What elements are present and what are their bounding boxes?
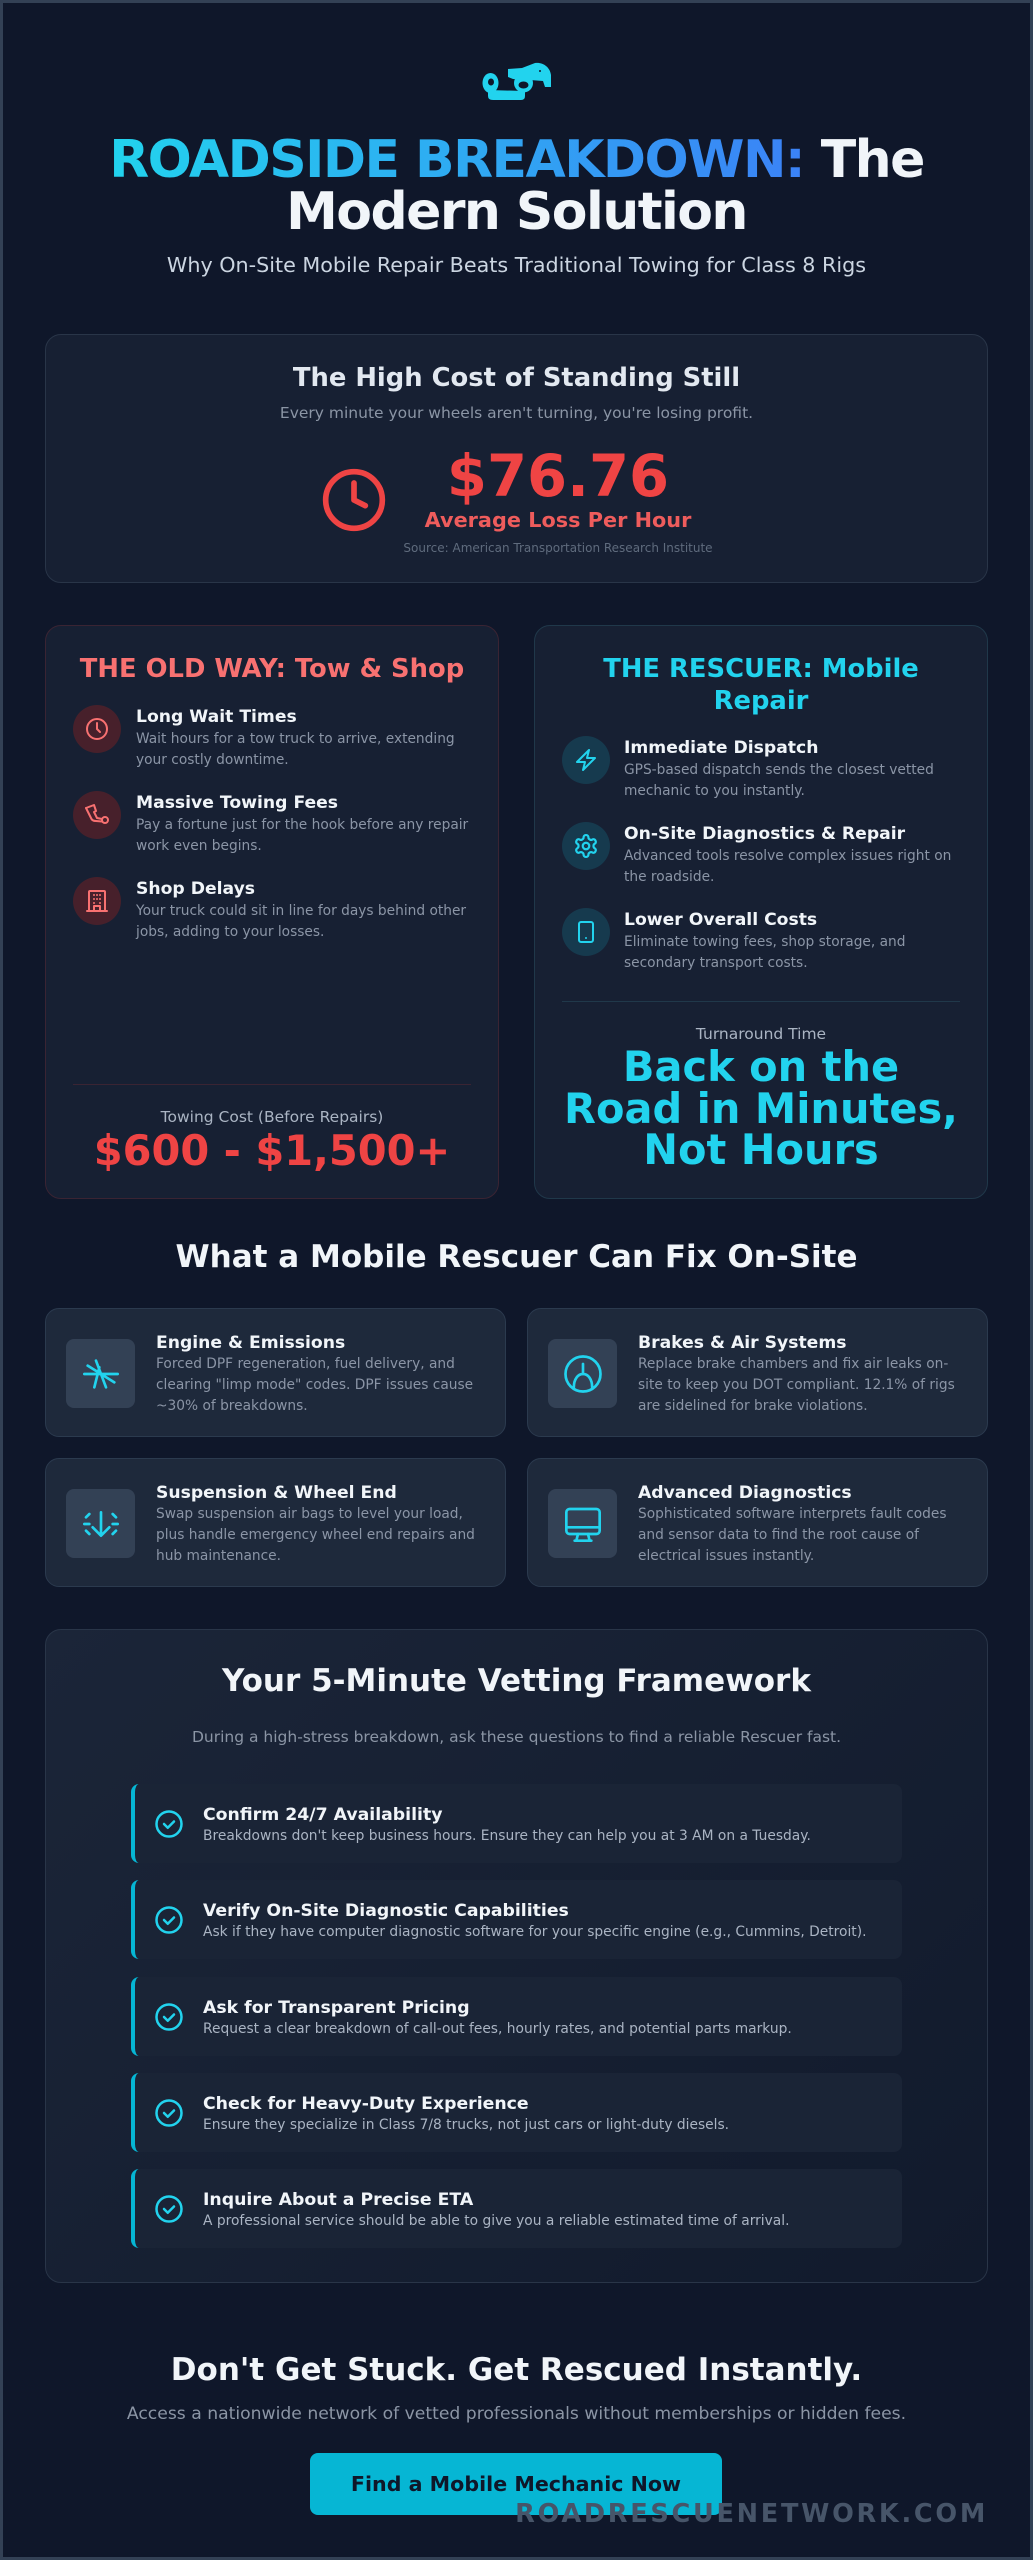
item: availability	[131, 1784, 902, 1863]
card: advanced diagnostics	[527, 1458, 988, 1587]
card heading: Advanced Diagnostics	[638, 1483, 852, 1503]
item: eta	[131, 2169, 902, 2248]
item heading: Lower Overall Costs	[624, 910, 817, 930]
icon: check	[155, 2099, 183, 2127]
icon: gear	[562, 822, 610, 870]
card text: ~30% of breakdowns.	[156, 1398, 308, 1414]
item text: Pay a fortune just for the hook before any repair	[136, 817, 468, 833]
card text: Replace brake chambers and fix air leaks on-	[638, 1356, 948, 1372]
item: on-site diagnostics	[562, 822, 951, 885]
text: vetting intro: During a high-stress breakdown, ask these questions to find a reliable Rescuer fast.	[192, 1728, 841, 1746]
icon: monitor	[548, 1489, 617, 1558]
heading: what a rescuer can fix: What a Mobile Rescuer Can Fix On-Site	[175, 1239, 858, 1275]
panel: vetting framework	[45, 1629, 988, 2283]
label: average loss: Average Loss Per Hour	[425, 508, 691, 532]
item heading: Verify On-Site Diagnostic Capabilities	[203, 1901, 569, 1921]
item heading: Confirm 24/7 Availability	[203, 1805, 442, 1825]
heading: rescuer: Repair	[714, 686, 808, 716]
item text	[136, 903, 466, 940]
item text: Ensure they specialize in Class 7/8 trucks, not just cars or light-duty diesels.	[203, 2117, 729, 2133]
heading: old way: THE OLD WAY: Tow & Shop	[80, 654, 464, 684]
item text: A professional service should be able to give you a reliable estimated time of arrival.	[203, 2213, 789, 2229]
item: long wait times	[73, 705, 455, 768]
card text: Sophisticated software interprets fault codes	[638, 1506, 947, 1522]
icon: tablet	[562, 908, 610, 956]
icon: clock	[73, 705, 121, 753]
item: experience	[131, 2073, 902, 2152]
stat: turnaround: Road in Minutes,	[564, 1084, 958, 1133]
stat: turnaround: Back on the	[623, 1042, 899, 1091]
item text	[624, 848, 951, 885]
watermark: ROADRESCUENETWORK.COM	[515, 2499, 988, 2529]
item text: work even begins.	[136, 838, 262, 854]
panel: the rescuer	[534, 625, 988, 1199]
card heading: Brakes & Air Systems	[638, 1333, 846, 1353]
item text: Your truck could sit in line for days behind other	[136, 903, 466, 919]
card text: clearing "limp mode" codes. DPF issues cause	[156, 1377, 473, 1393]
icon: building	[73, 877, 121, 925]
icon: check	[155, 2003, 183, 2031]
text: every minute: Every minute your wheels aren't turning, you're losing profit.	[280, 404, 753, 422]
icon: clock	[322, 468, 386, 532]
item text: the roadside.	[624, 869, 714, 885]
text: call to action: Access a nationwide network of vetted professionals without memberships or hidden fees.	[127, 2404, 906, 2424]
heading: rescuer: THE RESCUER: Mobile	[603, 654, 919, 684]
item: lower costs	[562, 908, 906, 971]
item text: Request a clear breakdown of call-out fees, hourly rates, and potential parts markup.	[203, 2021, 792, 2037]
stat: loss per hour: $76.76	[447, 443, 669, 510]
item heading: Immediate Dispatch	[624, 738, 818, 758]
icon: check	[155, 1810, 183, 1838]
button: find a mechanic	[310, 2453, 722, 2515]
title: Modern Solution	[286, 182, 747, 242]
item text	[624, 934, 906, 971]
card text: electrical issues instantly.	[638, 1548, 814, 1564]
item text: Advanced tools resolve complex issues right on	[624, 848, 951, 864]
card: engine and emissions	[45, 1308, 506, 1437]
item text: mechanic to you instantly.	[624, 783, 805, 799]
icon: engine	[66, 1339, 135, 1408]
item text: Ask if they have computer diagnostic software for your specific engine (e.g., Cummins, Detroit).	[203, 1924, 866, 1940]
item text: GPS-based dispatch sends the closest vetted	[624, 762, 934, 778]
icon: tow hook	[73, 791, 121, 839]
item text: Breakdowns don't keep business hours. Ensure they can help you at 3 AM on a Tuesday.	[203, 1828, 811, 1844]
card text	[638, 1506, 947, 1564]
item text	[624, 762, 934, 799]
card text: Swap suspension air bags to level your load,	[156, 1506, 463, 1522]
item heading: Shop Delays	[136, 879, 255, 899]
item text: your costly downtime.	[136, 752, 289, 768]
icon: brake wheel	[548, 1339, 617, 1408]
item text: Wait hours for a tow truck to arrive, extending	[136, 731, 455, 747]
item: towing fees	[73, 791, 468, 854]
item text	[136, 731, 455, 768]
card text: and sensor data to find the root cause of	[638, 1527, 919, 1543]
card text	[156, 1506, 475, 1564]
card text	[156, 1356, 473, 1414]
card text: plus handle emergency wheel end repairs and	[156, 1527, 475, 1543]
item heading: Massive Towing Fees	[136, 793, 338, 813]
item heading: Long Wait Times	[136, 707, 297, 727]
heading: high cost: The High Cost of Standing Still	[293, 363, 740, 393]
item: shop delays	[73, 877, 466, 940]
title: ROADSIDE BREAKDOWN: The	[109, 130, 924, 190]
stat: towing cost: $600 - $1,500+	[94, 1126, 450, 1175]
item heading: Ask for Transparent Pricing	[203, 1998, 470, 2018]
panel: the old way	[45, 625, 499, 1199]
item text	[136, 817, 468, 854]
card text: site to keep you DOT compliant. 12.1% of rigs	[638, 1377, 955, 1393]
card heading: Engine & Emissions	[156, 1333, 345, 1353]
title	[109, 130, 924, 242]
icon: tow truck logo	[482, 62, 551, 100]
item: immediate dispatch	[562, 736, 934, 799]
card: suspension	[45, 1458, 506, 1587]
item heading: Inquire About a Precise ETA	[203, 2190, 473, 2210]
icon: check	[155, 2195, 183, 2223]
icon: check	[155, 1906, 183, 1934]
item: diagnostics	[131, 1880, 902, 1959]
item heading: Check for Heavy-Duty Experience	[203, 2094, 529, 2114]
label: turnaround: Turnaround Time	[696, 1025, 826, 1043]
item text: secondary transport costs.	[624, 955, 808, 971]
heading: vetting: Your 5-Minute Vetting Framework	[222, 1663, 811, 1699]
card text: Forced DPF regeneration, fuel delivery, and	[156, 1356, 455, 1372]
stat: turnaround: Not Hours	[643, 1125, 879, 1174]
item text: jobs, adding to your losses.	[136, 924, 324, 940]
item heading: On-Site Diagnostics & Repair	[624, 824, 905, 844]
icon: bolt	[562, 736, 610, 784]
source note: Source: American Transportation Research Institute	[403, 541, 713, 555]
panel: cost of downtime	[45, 334, 988, 583]
icon: suspension	[66, 1489, 135, 1558]
item: pricing	[131, 1977, 902, 2056]
card text	[638, 1356, 955, 1414]
card text: hub maintenance.	[156, 1548, 281, 1564]
button: find a mechanic: Find a Mobile Mechanic Now	[351, 2472, 681, 2496]
heading: call to action: Don't Get Stuck. Get Rescued Instantly.	[171, 2352, 862, 2388]
label: towing cost: Towing Cost (Before Repairs)	[161, 1108, 383, 1126]
stat: turnaround	[564, 1042, 958, 1174]
card text: are sidelined for brake violations.	[638, 1398, 868, 1414]
item text: Eliminate towing fees, shop storage, and	[624, 934, 906, 950]
card heading: Suspension & Wheel End	[156, 1483, 397, 1503]
subtitle: Why On-Site Mobile Repair Beats Traditional Towing for Class 8 Rigs	[167, 253, 866, 277]
card: brakes and air	[527, 1308, 988, 1437]
heading: rescuer	[603, 654, 919, 716]
